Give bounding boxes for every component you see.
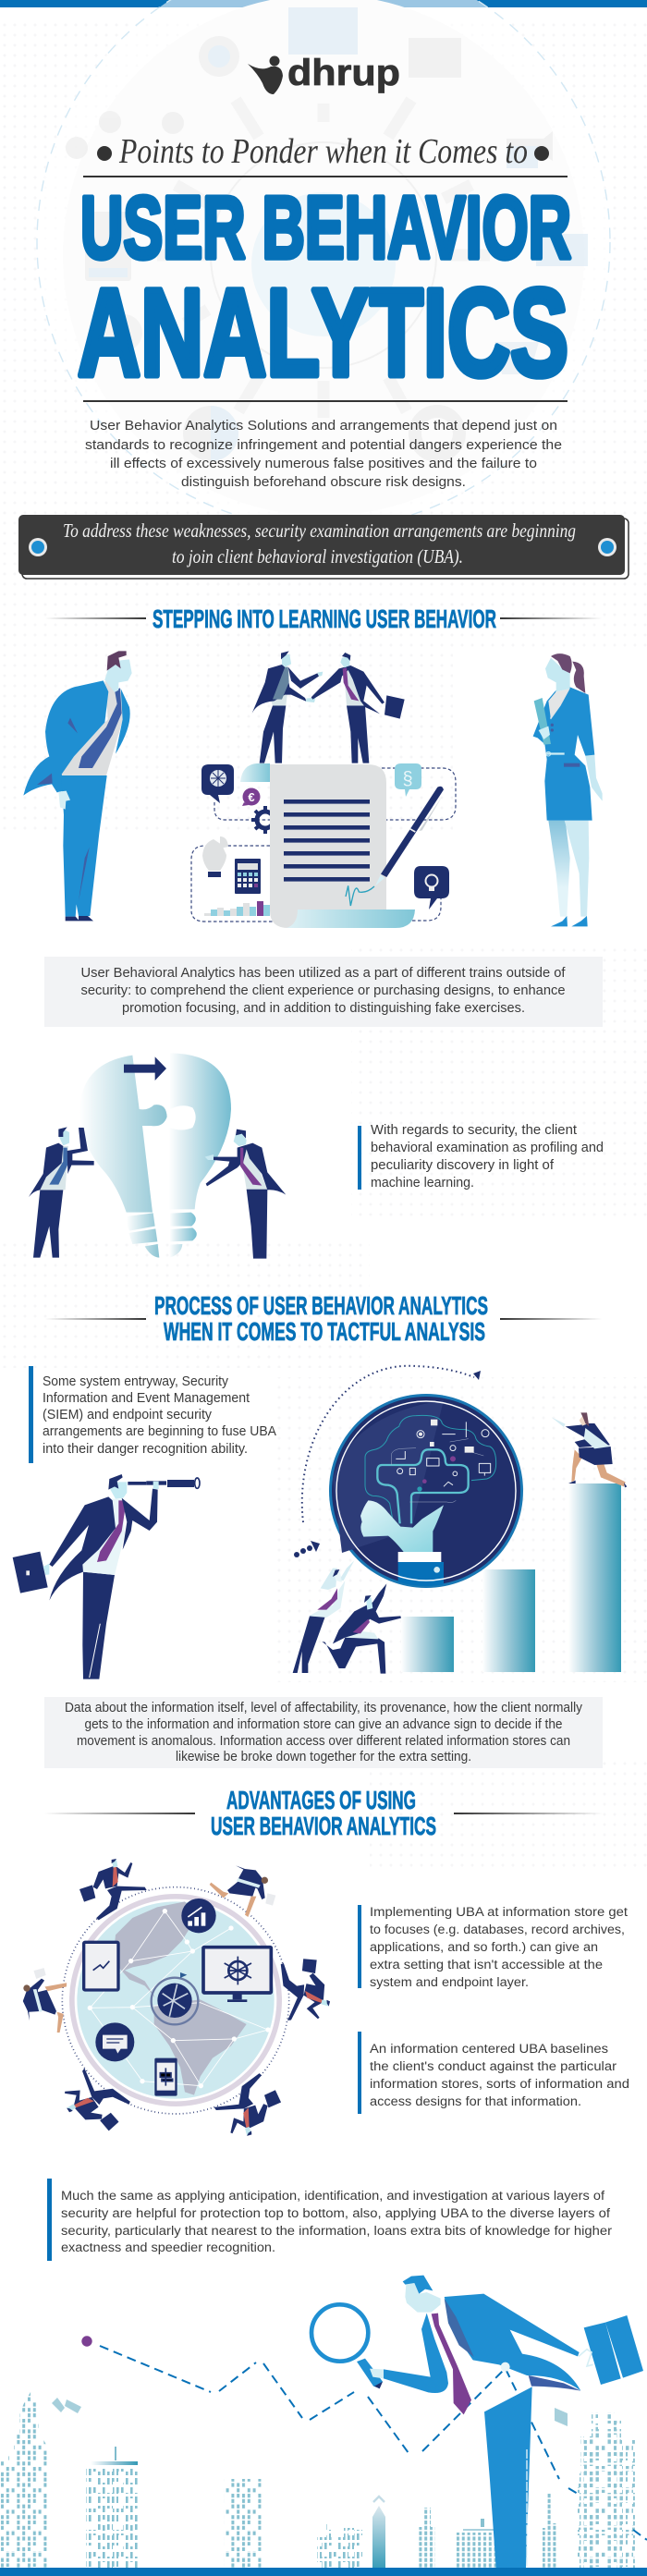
- text block: SIEM: (SIEM) and endpoint security: [43, 1407, 212, 1422]
- text block: layers of security: Much the same as applying anticipation, identification, and investigation at various layers of: [61, 2189, 604, 2203]
- paper footer roll: [287, 910, 415, 928]
- figure: top-right runner: [210, 1865, 275, 1917]
- illustration: circular tech panel with hand: [329, 1394, 523, 1588]
- text block: security profiling: peculiarity discovery in light of: [371, 1158, 555, 1173]
- intro paragraph: User Behavior Analytics Solutions and arrangements that depend just on: [90, 418, 557, 433]
- icon: pen: [346, 787, 444, 906]
- text block: security profiling: With regards to security, the client: [371, 1123, 577, 1138]
- globe: [69, 1894, 282, 2106]
- magnifying glass: [311, 2304, 383, 2388]
- text block: security profiling: behavioral examination as profiling and: [371, 1141, 604, 1155]
- icon: roll top: [240, 763, 270, 782]
- top bar: [0, 0, 647, 7]
- text block: grey box 1: [44, 957, 603, 1027]
- network lines: [90, 1911, 268, 2086]
- text block: grey box 2: [44, 1697, 603, 1768]
- heading: advantages of using UBA: ADVANTAGES OF USING: [226, 1786, 416, 1814]
- text block: layers of security: exactness and speedier recognition.: [61, 2240, 275, 2254]
- bulb base: [127, 1213, 197, 1258]
- icon: rotating disk: [152, 1972, 198, 2024]
- figure: left man: [29, 1127, 94, 1258]
- text block: information centered UBA: information stores, sorts of information and: [370, 2077, 629, 2091]
- intro paragraph: [85, 418, 562, 490]
- text block: information centered UBA: the client's conduct against the particular: [370, 2059, 617, 2073]
- dotted orbit: [62, 1887, 289, 2114]
- body: [370, 2276, 580, 2568]
- logo wordmark: dhrup: [287, 53, 400, 93]
- icon: monitor: [203, 1947, 271, 2002]
- illustration: woman in blue dress: [533, 653, 603, 926]
- icon: calculator: [235, 859, 261, 894]
- text block: grey box 1: promotion focusing, and in addition to distinguishing fake exercises.: [122, 1001, 525, 1016]
- icon: tablet: [84, 1942, 118, 1990]
- logo: [248, 53, 400, 94]
- text block: information centered UBA: [358, 2032, 629, 2114]
- text block: implementing UBA: applications, and so forth.) can give an: [370, 1940, 598, 1954]
- intro paragraph: distinguish beforehand obscure risk designs.: [181, 474, 466, 490]
- figure: woman climbing bar: [552, 1412, 627, 1487]
- figure: right man shaking hands: [311, 653, 405, 763]
- purple start dot: [81, 2336, 92, 2347]
- text block: grey box 2: gets to the information and information store can give an advance sign to decide if the: [85, 1716, 562, 1732]
- icon: euro bubble: €: [248, 790, 255, 804]
- illustration: dotted arc arrow: [302, 1366, 481, 1522]
- text block: SIEM: Information and Event Management: [43, 1390, 250, 1406]
- illustration: man with magnifier and briefcase: [311, 2276, 643, 2568]
- text block: implementing UBA: to focuses (e.g. databases, record archives,: [370, 1923, 625, 1936]
- text block: SIEM: into their danger recognition ability.: [43, 1441, 248, 1457]
- bar chart: [401, 1483, 621, 1672]
- figure: two men pushing: [293, 1560, 401, 1674]
- figure: bottom-right runner: [212, 2071, 284, 2139]
- text block: implementing UBA: extra setting that isn't accessible at the: [370, 1958, 603, 1972]
- figure: right runner: [261, 1947, 345, 2033]
- icon: globe bubble: [201, 764, 234, 803]
- arrow: [124, 1056, 166, 1080]
- illustration: dashed route: [100, 2346, 647, 2540]
- text block: SIEM: [29, 1366, 276, 1463]
- illustration: city skyline: [0, 2392, 635, 2568]
- text block: layers of security: [47, 2179, 613, 2261]
- figure: right man: [205, 1129, 286, 1259]
- text block: security profiling: [358, 1123, 604, 1190]
- text block: information centered UBA: An information centered UBA baselines: [370, 2042, 608, 2056]
- icon: lightbulb bubble: [414, 866, 449, 910]
- briefcase: [579, 2315, 643, 2385]
- subtitle: Points to Ponder when it Comes to: [118, 132, 528, 171]
- callout: dark banner: to join client behavioral investigation (UBA).: [172, 545, 463, 568]
- icon: puzzle bulb: [202, 836, 228, 877]
- illustration: puzzle lightbulb: [29, 1053, 286, 1259]
- circuit lines: [365, 1415, 496, 1523]
- right half of bulb: [169, 1053, 231, 1209]
- heading: advantages of using UBA: USER BEHAVIOR ANALYTICS: [211, 1812, 436, 1840]
- icon: phone: [154, 2058, 177, 2096]
- sleeve and hand: [360, 1500, 444, 1588]
- text block: grey box 2: Data about the information itself, level of affectability, its provenance, how the client normally: [65, 1700, 582, 1715]
- mini bar chart: [204, 901, 270, 916]
- heading: advantages of using UBA: [44, 1786, 603, 1840]
- icon: rising chart: [181, 1898, 216, 1933]
- bottom bar: [0, 2568, 647, 2576]
- illustration: contract document with icons: [191, 763, 456, 928]
- text block: implementing UBA: Implementing UBA at information store get: [370, 1905, 628, 1919]
- figure: top-left runner: [79, 1859, 147, 1920]
- text block: layers of security: security are helpful for protection top to bottom, also, applying UBA to the diverse layers of: [61, 2206, 610, 2220]
- dashed connectors: [191, 768, 456, 922]
- text block: layers of security: security, particularly that nearest to the information, loans extra bits of knowledge for higher: [61, 2224, 613, 2238]
- text block: security profiling: machine learning.: [371, 1176, 474, 1190]
- illustration: two businessmen on contract: [252, 651, 405, 763]
- intro paragraph: ill effects of excessively numerous false positives and the failure to: [110, 456, 537, 471]
- main title: [78, 178, 571, 402]
- illustration: dots arrow: [294, 1541, 320, 1557]
- text block: implementing UBA: system and endpoint layer.: [370, 1975, 529, 1989]
- callout: dark banner: [18, 515, 629, 579]
- intro paragraph: standards to recognize infringement and potential dangers experience the: [85, 437, 562, 453]
- icon: chat: [95, 2022, 134, 2061]
- left half of bulb: [79, 1056, 167, 1213]
- background pattern and faded tech circle: [0, 0, 647, 1867]
- illustration: man in blue suit: [23, 651, 132, 921]
- figure: left man shaking hands: [252, 651, 323, 763]
- illustration: globe with runners: [8, 1859, 345, 2143]
- heading: process of UBA: [45, 1291, 602, 1346]
- icon: logo mark: [248, 55, 283, 94]
- text block: information centered UBA: access designs for that information.: [370, 2094, 581, 2108]
- text block: grey box 2: movement is anomalous. Information access over different related information stores can: [77, 1733, 570, 1749]
- figure: bottom-left runner: [55, 2057, 138, 2143]
- text lines on paper: [284, 800, 370, 882]
- icon: gear: [251, 806, 274, 834]
- text block: grey box 2: likewise be broke down together for the extra setting.: [176, 1749, 471, 1764]
- text block: implementing UBA: [358, 1905, 628, 1989]
- text block: grey box 1: security: to comprehend the client experience or purchasing designs, to enhance: [81, 983, 566, 998]
- icon: euro bubble: [242, 787, 261, 806]
- illustration: man with telescope: [13, 1474, 200, 1679]
- text block: grey box 1: User Behavioral Analytics has been utilized as a part of different trains outside of: [81, 966, 566, 981]
- icon: section bubble: [395, 763, 421, 797]
- figure: left runner: [8, 1959, 87, 2043]
- icon: section bubble: §: [402, 769, 413, 789]
- text block: SIEM: Some system entryway, Security: [43, 1373, 228, 1389]
- text block: SIEM: arrangements are beginning to fuse UBA: [43, 1423, 276, 1439]
- panel: paper sheet: [270, 764, 386, 928]
